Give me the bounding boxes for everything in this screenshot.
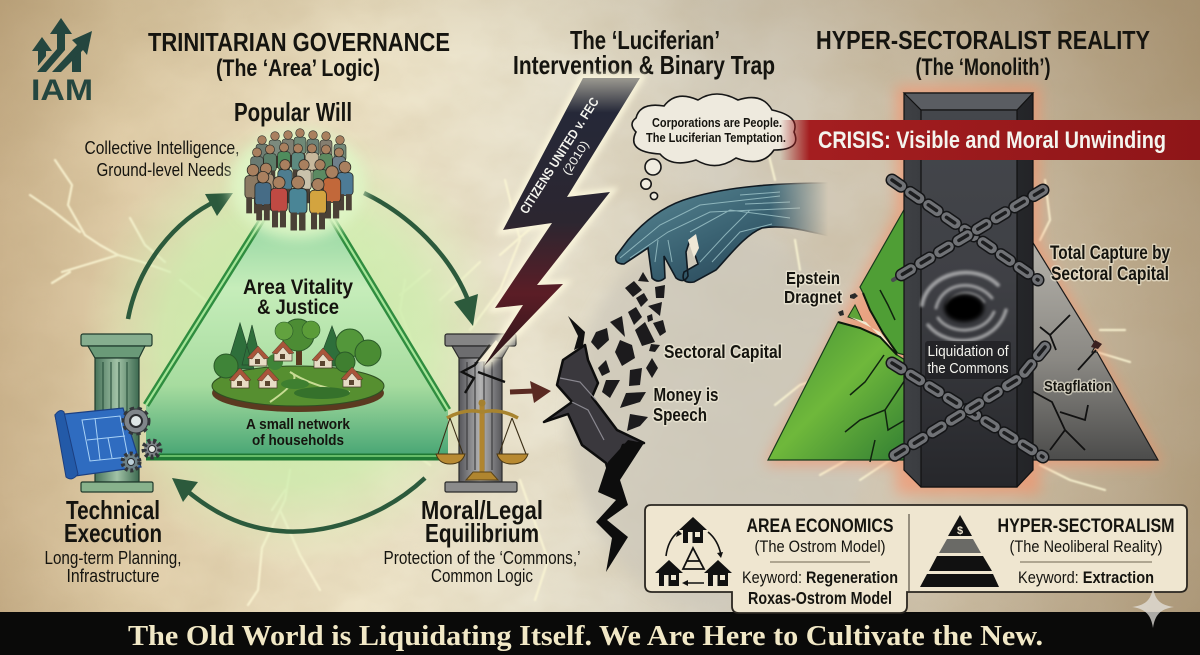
label: technical execution: Execution [64, 518, 162, 548]
heading: luciferian intervention: Intervention & Binary Trap [513, 50, 775, 80]
label: total capture [1050, 243, 1170, 285]
chain crossing: lower [892, 347, 1045, 457]
text: hyper-sectoralism: Keyword: Extraction [1018, 568, 1154, 587]
label: area vitality and justice: & Justice [257, 296, 339, 319]
label: stagflation: Stagflation [1044, 378, 1112, 395]
footer bar [0, 612, 1200, 655]
label: total capture: Sectoral Capital [1051, 264, 1169, 285]
label: technical execution: Infrastructure [66, 566, 160, 586]
crisis banner [780, 120, 1200, 160]
icon: circuit hand [616, 183, 830, 282]
icon: green pillar [81, 334, 153, 492]
label: small network of households [246, 417, 351, 449]
heading: trinitarian governance [148, 27, 450, 82]
heading: luciferian intervention [513, 25, 775, 80]
governance triangle [146, 215, 448, 458]
broken triangle: gray side [1030, 238, 1158, 460]
label: liquidation of the commons: Liquidation of [928, 343, 1009, 360]
logo: IAM: IAM [31, 74, 93, 107]
label: epstein dragnet: Dragnet [784, 287, 842, 307]
label: popular will: Popular Will [234, 97, 352, 127]
label: small network of households: of households [252, 433, 344, 449]
label: moral legal equilibrium: Common Logic [431, 566, 533, 586]
arc arrow: moral to technical [172, 478, 425, 532]
arrow: damage to crack [510, 381, 551, 403]
label: liquidation of the commons: the Commons [928, 360, 1008, 377]
logo: IAM [31, 18, 93, 107]
black hole vortex [922, 273, 1006, 341]
label: epstein dragnet: Epstein [786, 268, 840, 288]
thought bubble: Corporations are People. [652, 115, 782, 130]
label: moral legal equilibrium: Protection of the ‘Commons,’ [384, 548, 580, 568]
thought bubble: The Luciferian Temptation. [646, 130, 786, 145]
icon: households in a cycle [655, 517, 732, 586]
text: area economics: Keyword: Regeneration [742, 568, 898, 587]
text: area economics: (The Ostrom Model) [754, 537, 886, 556]
icon: scales of justice [436, 400, 528, 480]
illustration: village on a disk [212, 319, 384, 412]
text: area economics [742, 516, 898, 608]
label: moral legal equilibrium [384, 495, 580, 586]
legend panel [645, 505, 1187, 613]
footer bar: The Old World is Liquidating Itself. We Are Here to Cultivate the New. [128, 621, 1043, 652]
crack fissure [544, 316, 644, 572]
text: hyper-sectoralism [998, 516, 1174, 587]
label: liquidation of the commons [925, 341, 1011, 379]
green glow behind triangle [81, 120, 511, 570]
label: technical execution: Technical [66, 495, 160, 525]
heading: luciferian intervention: The ‘Luciferian’ [570, 25, 720, 55]
label: money is speech [653, 385, 718, 425]
heading: trinitarian governance: (The ‘Area’ Logic) [216, 55, 380, 82]
label: technical execution [44, 495, 182, 586]
label: sectoral capital: Sectoral Capital [664, 342, 782, 362]
arc arrow: popular will to moral [364, 193, 478, 326]
heading: hyper-sectoralist reality: (The ‘Monolith’) [916, 54, 1050, 81]
chain crossing: upper [892, 180, 1043, 280]
arc arrow: popular will to technical [128, 193, 233, 319]
text: area economics: Roxas-Ostrom Model [748, 588, 892, 608]
label: epstein dragnet [784, 268, 858, 316]
label: area vitality and justice: Area Vitality [243, 276, 353, 299]
falling shards [591, 272, 666, 431]
icon: pyramid: $ [957, 525, 963, 537]
thought bubble [632, 94, 796, 200]
broken triangle: green side [768, 208, 905, 462]
text: hyper-sectoralism: (The Neoliberal Reality) [1010, 537, 1162, 556]
text: area economics: AREA ECONOMICS [746, 516, 894, 537]
icon: blueprint and gears [55, 408, 160, 479]
label: money is speech: Speech [653, 405, 707, 425]
lightning bolt: citizens united: CITIZENS UNITED v. FEC [517, 94, 602, 217]
label: popular will: Collective Intelligence, [84, 138, 240, 158]
faint lightning background [30, 140, 1130, 605]
label: moral legal equilibrium: Moral/Legal [421, 495, 543, 525]
lightning bolt: citizens united: (2010) [560, 138, 592, 178]
icon: cracked stone pillar [445, 334, 517, 492]
label: area vitality and justice [243, 276, 353, 319]
label: moral legal equilibrium: Equilibrium [425, 518, 539, 548]
lightning bolt: citizens united [484, 78, 640, 366]
label: popular will: Ground-level Needs [96, 160, 232, 180]
watermark sparkle [1132, 587, 1174, 628]
heading: trinitarian governance: TRINITARIAN GOVERNANCE [148, 27, 450, 57]
heading: hyper-sectoralist reality [816, 25, 1150, 81]
label: technical execution: Long-term Planning, [44, 548, 182, 568]
label: money is speech: Money is [654, 385, 718, 405]
label: popular will [84, 97, 352, 180]
dark monolith [904, 93, 1033, 487]
orange glow around monolith [765, 86, 1162, 494]
label: total capture: Total Capture by [1050, 243, 1170, 264]
label: small network of households: A small network [246, 417, 351, 433]
icon: pyramid [920, 515, 999, 587]
icon: crowd of people [230, 129, 366, 239]
